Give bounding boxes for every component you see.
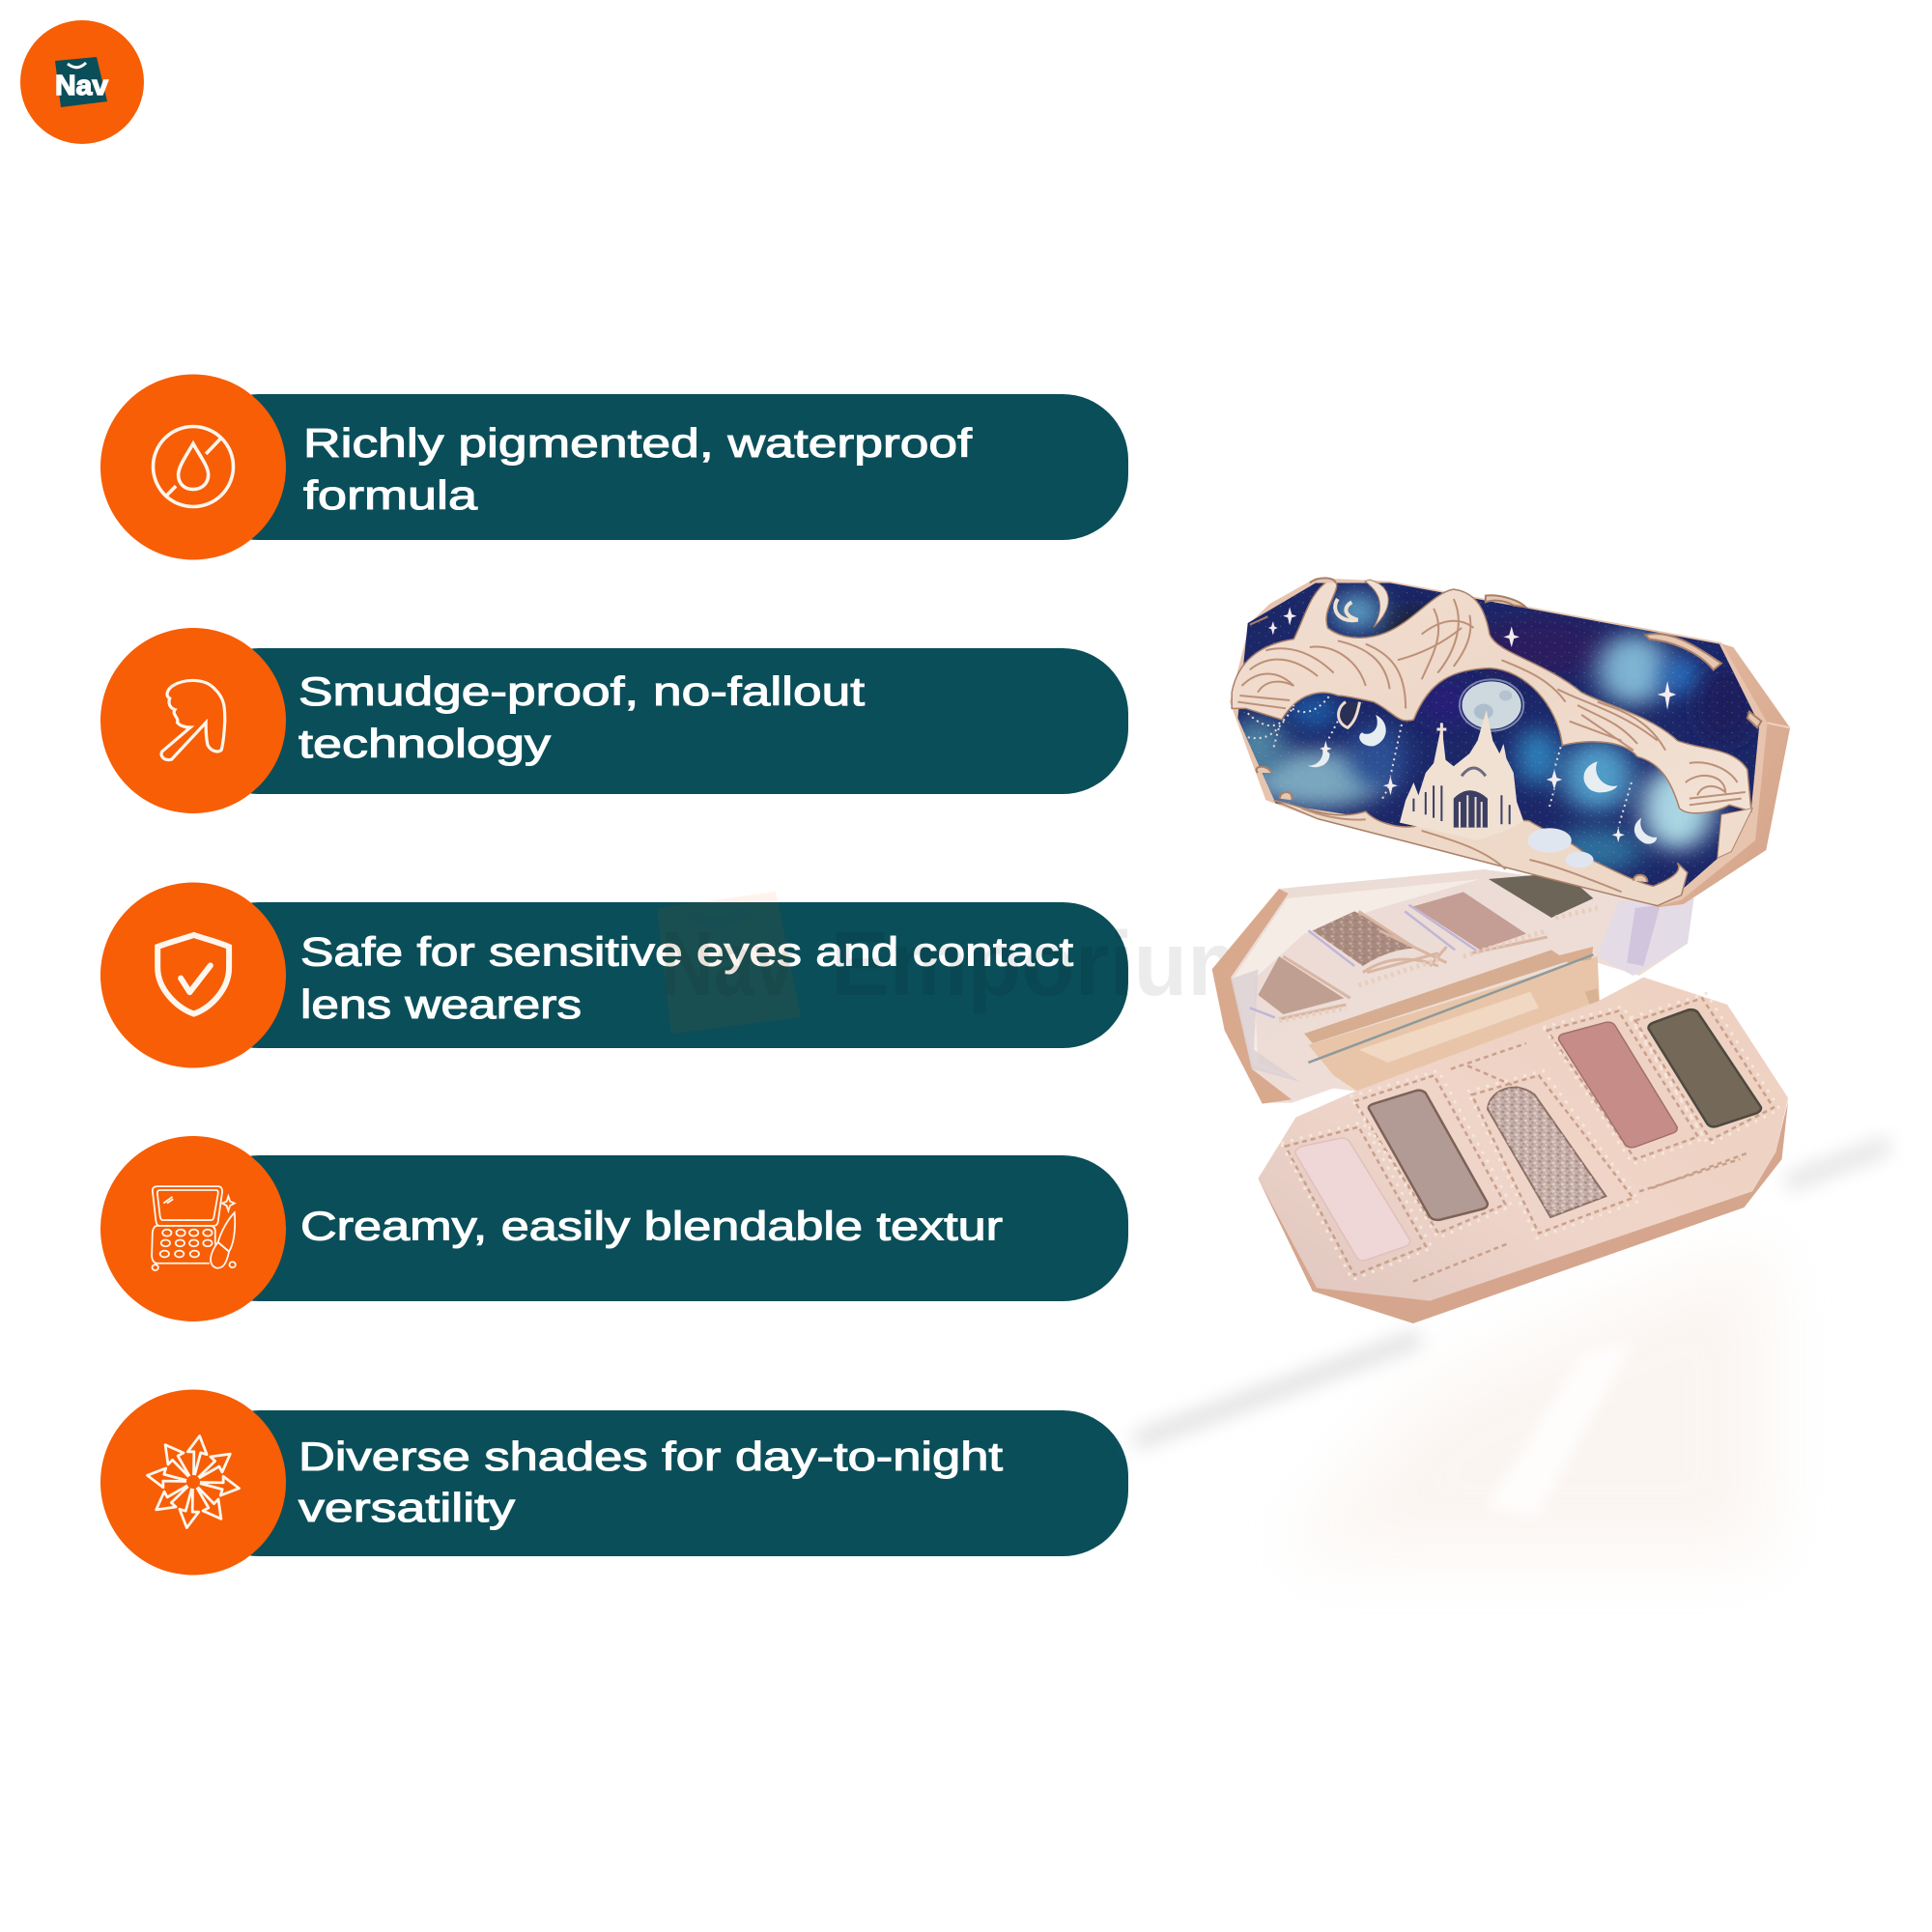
hinge wire — [1308, 954, 1593, 1063]
feature row 3 — [100, 883, 1128, 1068]
icon: smudge applicator — [161, 680, 225, 760]
logo badge: Nav — [55, 71, 108, 101]
icon: no water drop — [153, 427, 234, 506]
lid side — [1637, 642, 1790, 907]
lid cover — [1222, 570, 1790, 918]
feature row 4 — [100, 1136, 1128, 1321]
feature row 5 — [100, 1389, 1128, 1575]
mirror lid inner tray — [1212, 869, 1693, 1104]
night sky — [1237, 582, 1759, 889]
logo badge — [20, 20, 144, 144]
pan: glitter arch — [1488, 1088, 1605, 1217]
right column ornament — [1718, 809, 1752, 858]
pan: taupe — [1369, 1091, 1488, 1220]
icon: palette and brush — [152, 1186, 236, 1270]
hinge band — [1304, 950, 1568, 1043]
moon — [1460, 679, 1523, 731]
castle — [1400, 710, 1523, 840]
feature text 3 — [300, 929, 1073, 1027]
feature text 2: Smudge-proof, no-fallout — [298, 668, 865, 714]
feature text 1: Richly pigmented, waterproof — [303, 420, 972, 466]
feature row 2 — [100, 628, 1128, 813]
icon: radiating arrows — [146, 1435, 241, 1529]
watermark — [657, 892, 1265, 1034]
feature text 5: Diverse shades for day-to-night — [298, 1434, 1003, 1479]
feature text 5: versatility — [298, 1485, 515, 1530]
ornamental pan frames — [1286, 998, 1774, 1282]
stars — [1268, 607, 1676, 842]
feature text 2 — [298, 668, 865, 766]
feature text 1: formula — [303, 472, 478, 518]
watermark: Nav — [661, 913, 795, 1015]
pan: olive — [1649, 1009, 1761, 1126]
product shadow and reflection — [1135, 1145, 1889, 1555]
feature text 3: lens wearers — [300, 981, 582, 1027]
pan: pale pink — [1295, 1138, 1410, 1261]
pan: rose — [1559, 1022, 1677, 1148]
watermark: Emporium — [831, 913, 1265, 1015]
crescent moons — [1308, 715, 1657, 844]
feature text 1 — [303, 420, 972, 518]
feature text 4: Creamy, easily blendable textur — [300, 1204, 1003, 1248]
feature text 5 — [298, 1434, 1003, 1530]
product: eyeshadow palette — [1212, 570, 1790, 1323]
frame bottom ornament — [1274, 800, 1688, 906]
ornate hair frame — [1232, 578, 1761, 906]
feature text 3: Safe for sensitive eyes and contact — [300, 929, 1073, 974]
bead chains — [1248, 696, 1632, 828]
icon: shield check — [157, 935, 229, 1014]
lid face — [1230, 578, 1768, 906]
palette base — [1258, 978, 1788, 1323]
hair swirl lines — [1237, 599, 1746, 805]
feature text 2: technology — [298, 721, 551, 766]
feature row 1 — [100, 375, 1128, 560]
